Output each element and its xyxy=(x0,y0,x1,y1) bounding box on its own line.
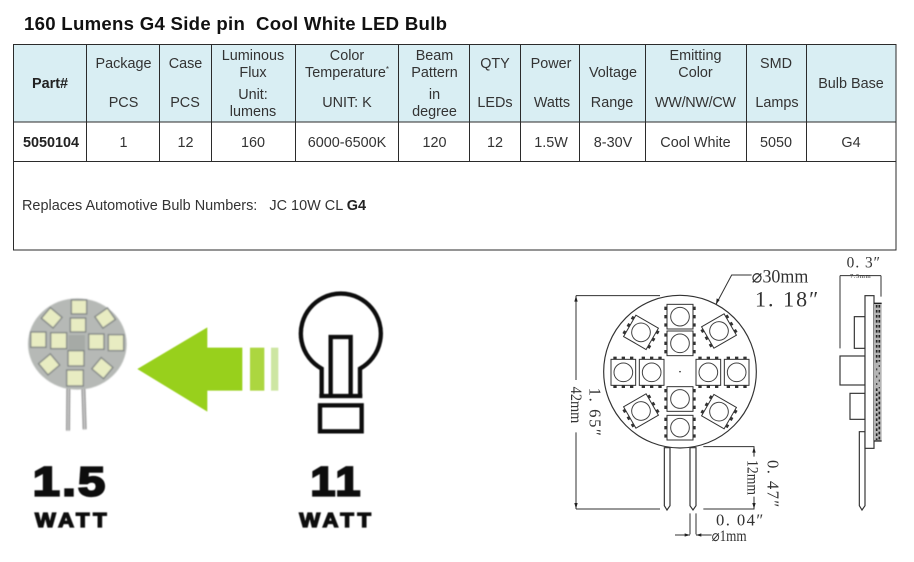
label: 11 watt: WATT xyxy=(299,510,371,532)
header labels: Flux xyxy=(239,65,267,81)
header labels: Lamps xyxy=(755,95,799,111)
dimension label: 1.65 inches: 1. 65″ xyxy=(585,388,604,436)
header labels xyxy=(32,48,884,120)
specification table xyxy=(14,44,896,250)
dimension label: 0.04 inches: 0. 04″ xyxy=(716,511,763,530)
data row: 8-30V xyxy=(594,135,633,151)
data row: Cool White xyxy=(660,135,731,151)
dimension label: diameter 30mm: ⌀30mm xyxy=(752,266,809,287)
label: 11 watt xyxy=(299,459,371,532)
header labels: Emitting xyxy=(670,48,721,64)
header labels: SMD xyxy=(760,56,792,72)
header labels: UNIT: K xyxy=(322,95,372,111)
header labels: Temperature xyxy=(305,65,386,81)
data row: 5050 xyxy=(760,135,792,151)
header labels: in xyxy=(429,87,440,103)
label: 1.5 watt xyxy=(33,458,107,532)
header labels: Power xyxy=(531,56,572,72)
dimension label: 1.18 inches: 1. 18″ xyxy=(755,287,818,312)
header labels: Luminous xyxy=(222,48,284,64)
data row: 1 xyxy=(119,135,128,151)
circular board xyxy=(604,295,756,448)
width label: 7.5mm: 7.5mm xyxy=(850,273,871,280)
header labels: Voltage xyxy=(589,65,637,81)
header labels: degree xyxy=(412,104,457,120)
label: 11 watt: 11 xyxy=(311,459,360,505)
data row: 120 xyxy=(422,135,447,151)
label: 1.5 watt: WATT xyxy=(35,510,107,532)
header labels: Watts xyxy=(534,95,570,111)
header labels: QTY xyxy=(480,56,510,72)
dimension lines xyxy=(576,275,754,535)
data row: 12 xyxy=(177,135,194,151)
wattage comparison illustration xyxy=(28,294,381,532)
width dimension xyxy=(840,276,881,348)
title: 160 Lumens G4 Side pin Cool White LED Bulb xyxy=(24,13,447,34)
header labels: WW/NW/CW xyxy=(655,95,736,111)
dimension arrowheads xyxy=(574,296,756,537)
header labels: Color xyxy=(678,65,713,81)
data row: G4 xyxy=(841,135,861,151)
header labels: PCS xyxy=(170,95,200,111)
header labels: Pattern xyxy=(411,65,458,81)
side profile components xyxy=(840,296,874,510)
data row: 6000-6500K xyxy=(308,135,387,151)
dimension label: 42mm: 42mm xyxy=(567,387,584,424)
technical drawing: side view xyxy=(840,255,882,510)
data row: 5050104 xyxy=(23,135,79,151)
header labels: Beam xyxy=(416,48,453,64)
green arrow pointing left xyxy=(137,327,278,412)
header labels: Color xyxy=(330,48,364,64)
header labels: Unit: xyxy=(238,87,268,103)
icon: incandescent bulb xyxy=(301,294,381,431)
header labels: PCS xyxy=(109,95,138,111)
pins xyxy=(664,448,696,510)
header labels: Range xyxy=(591,95,633,111)
table grid xyxy=(14,44,896,250)
table header background xyxy=(14,44,896,122)
data row xyxy=(23,135,861,151)
LED footprints xyxy=(611,304,749,440)
header labels: Bulb Base xyxy=(818,76,884,92)
header labels: * xyxy=(386,65,389,74)
width label: 0.3 inches: 0. 3″ xyxy=(847,255,880,272)
dimension label: diameter 1mm: ⌀1mm xyxy=(712,528,747,545)
technical drawing: front view xyxy=(567,266,818,545)
header labels: Package xyxy=(95,56,152,72)
data row: 160 xyxy=(241,135,265,151)
header labels: LEDs xyxy=(477,95,513,111)
data row: 1.5W xyxy=(534,135,568,151)
dimension label: 12mm: 12mm xyxy=(744,460,761,495)
data row: 12 xyxy=(487,135,503,151)
header labels: Case xyxy=(169,56,202,72)
LED strip edge xyxy=(874,303,882,441)
header labels: lumens xyxy=(230,104,276,120)
replacement note: Replaces Automotive Bulb Numbers: JC 10W CL G4 xyxy=(22,198,366,214)
dimension label: 0.47 inches: 0. 47″ xyxy=(763,460,782,507)
header labels: Part# xyxy=(32,76,68,92)
label: 1.5 watt: 1.5 xyxy=(33,458,105,504)
photo of LED bulb xyxy=(28,298,127,431)
